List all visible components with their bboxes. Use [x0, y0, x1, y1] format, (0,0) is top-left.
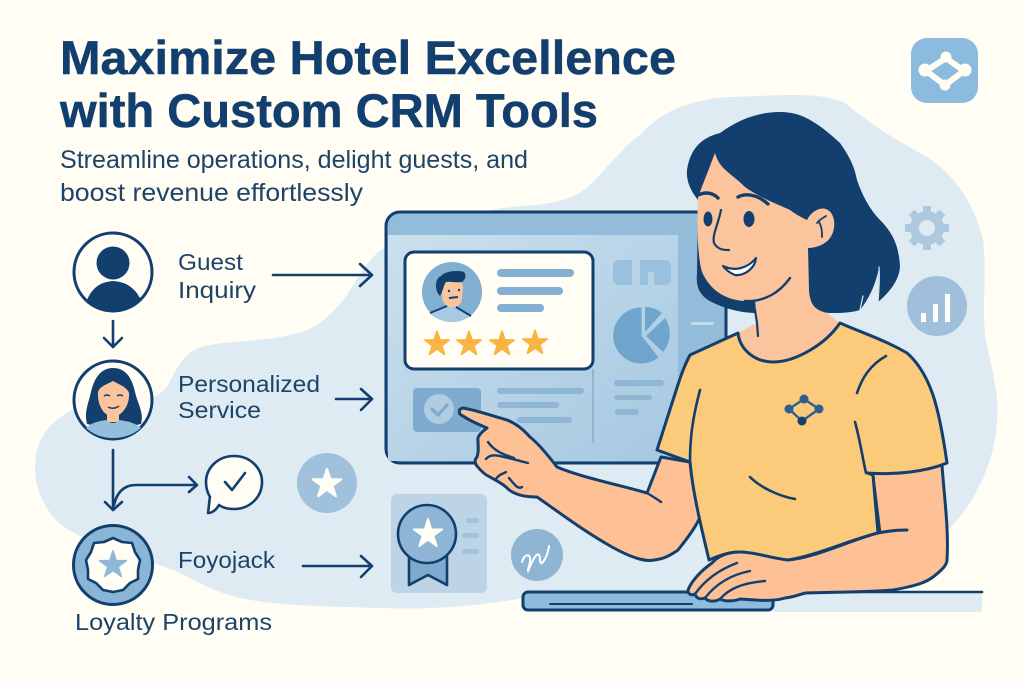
side text lines: [614, 380, 664, 415]
label: guest inquiry: Guest: [178, 249, 244, 275]
right arm: [770, 465, 947, 600]
icon: loyalty badge: [74, 526, 152, 604]
title: Maximize Hotel Excellence: [60, 31, 676, 84]
arrow: inquiry to service: [104, 321, 122, 347]
arrow: guest inquiry to dashboard: [273, 264, 372, 286]
card: guest profile: [405, 252, 593, 369]
hair: [687, 112, 900, 313]
logo on shirt: [784, 394, 824, 426]
label: loyalty programs: Loyalty Programs: [75, 609, 272, 635]
icon: staff avatar: [74, 361, 152, 439]
label: guest inquiry: Inquiry: [178, 277, 257, 303]
label: personalized service: Personalized: [178, 371, 320, 397]
button: approve: [413, 388, 481, 432]
label: foyojack: Foyojack: [178, 547, 276, 573]
arrow: service to loyalty with branch: [105, 450, 197, 510]
arrow: foyojack to award card: [303, 556, 372, 577]
icon: guest avatar: [74, 233, 152, 311]
icon: app logo: [911, 38, 978, 103]
pie chart: [613, 307, 670, 363]
icon: gear: [905, 206, 949, 250]
icon: award card: [391, 494, 487, 593]
subtitle: boost revenue effortlessly: [60, 179, 364, 207]
label: guest inquiry: [178, 249, 257, 303]
right hand and forearm: [688, 465, 947, 601]
left arm (pointing): [459, 408, 702, 560]
subtitle: Streamline operations, delight guests, and: [60, 146, 528, 174]
icon: trend circle: [511, 529, 563, 581]
facial features: [698, 193, 826, 275]
arrow: service to dashboard: [336, 389, 372, 410]
star rating: [425, 330, 547, 354]
title: with Custom CRM Tools: [59, 84, 598, 137]
mini charts: [613, 260, 671, 285]
text lines lower: [497, 388, 584, 423]
knuckle lines: [695, 563, 765, 599]
subtitle: [60, 146, 528, 207]
icon: bar chart circle: [907, 276, 967, 336]
icon: guest portrait: [422, 262, 482, 322]
hair strand slit: [860, 267, 879, 310]
yellow t-shirt: [657, 323, 947, 560]
panel: dashboard monitor: [386, 212, 726, 463]
icon: speech bubble check: [206, 456, 262, 513]
finger detail lines: [486, 442, 661, 502]
shirt fold lines: [690, 356, 886, 532]
label: personalized service: [178, 371, 320, 423]
text lines: [497, 269, 574, 312]
laptop base: [523, 592, 773, 610]
background blob: [35, 95, 998, 609]
panel: guest journey flow: [74, 233, 372, 635]
icon: star circle: [297, 453, 357, 513]
table strip: [773, 592, 982, 612]
illustration: woman pointing at dashboard: [459, 112, 982, 612]
label: personalized service: Service: [178, 397, 261, 423]
neck and face: [738, 248, 840, 362]
title: [59, 31, 676, 137]
